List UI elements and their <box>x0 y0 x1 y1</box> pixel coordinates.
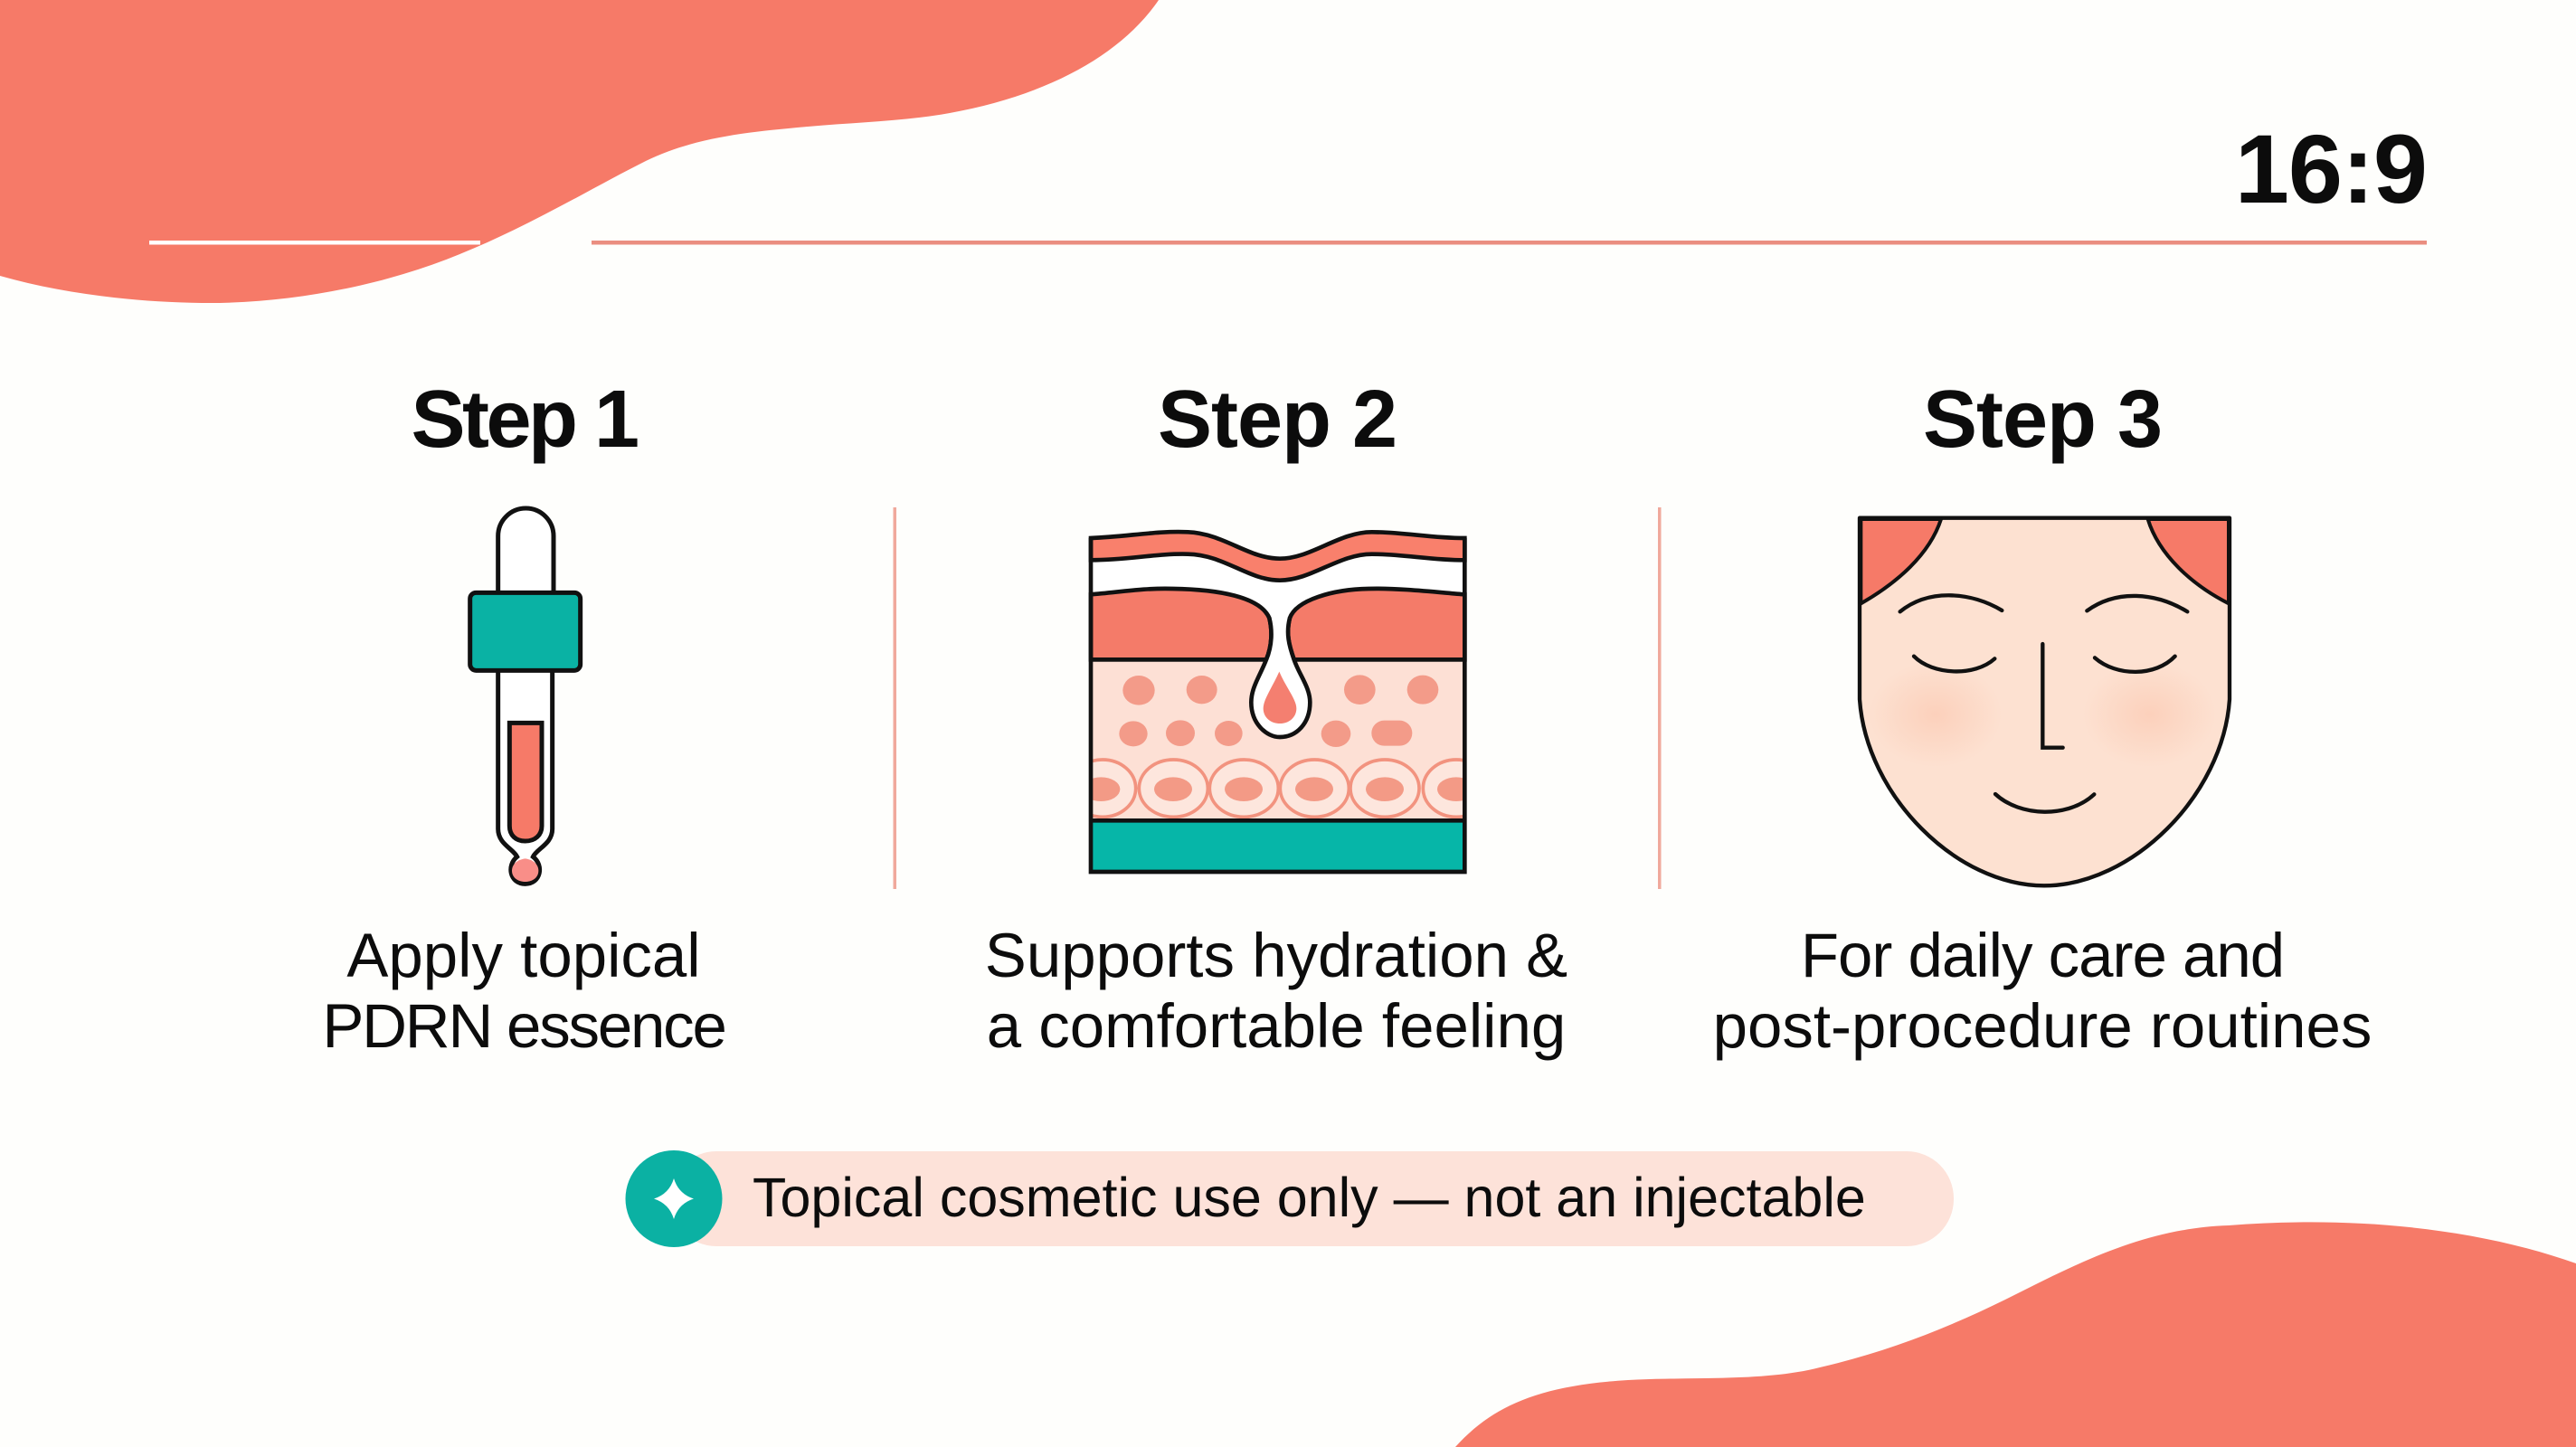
callout pill <box>669 1151 1954 1246</box>
teal base layer <box>1091 820 1464 872</box>
inner drop <box>1264 672 1296 724</box>
divider: step 2 and 3 <box>1658 507 1661 889</box>
step 3 heading: Step 3 <box>1923 374 2162 465</box>
step 1 description: PDRN essence <box>322 991 725 1061</box>
step 2 description: Supports hydration & <box>985 921 1567 990</box>
droplet at tip <box>512 858 538 882</box>
dermis particles <box>1119 675 1438 747</box>
dark coral layer right <box>1288 589 1464 659</box>
header rule on blob <box>149 241 480 244</box>
penetrating drop <box>1251 618 1310 737</box>
step 1 description: Apply topical <box>346 921 701 990</box>
liquid in tube <box>509 723 542 841</box>
aspect ratio label: 16:9 <box>2235 114 2427 223</box>
face shape <box>1860 518 2230 885</box>
cell row <box>1069 760 1490 817</box>
skin box outline <box>1091 538 1464 872</box>
hair right <box>2148 519 2229 603</box>
icon: teal badge with sparkle <box>626 1150 722 1247</box>
icon: dropper <box>470 508 581 884</box>
right cheek blush <box>2083 662 2216 767</box>
callout: usage note <box>626 1150 1954 1247</box>
top coral layer <box>1091 532 1464 581</box>
decorative blob: top left <box>0 0 1159 303</box>
white layer <box>1091 560 1464 659</box>
step 2 heading: Step 2 <box>1158 374 1397 465</box>
dropper collar <box>470 592 581 670</box>
icon: relaxed face <box>1860 518 2230 885</box>
decorative blob: bottom right <box>1455 1222 2576 1447</box>
callout text: Topical cosmetic use only — not an injectable <box>753 1167 1866 1228</box>
header rule <box>592 241 2427 244</box>
dermis layer <box>1091 659 1464 821</box>
step 3 description: post-procedure routines <box>1713 991 2372 1061</box>
dark coral layer left <box>1091 589 1272 659</box>
step 2 description: a comfortable feeling <box>987 991 1566 1061</box>
face features <box>1900 595 2187 812</box>
step 1 heading: Step 1 <box>411 374 638 465</box>
dropper bulb <box>498 508 554 592</box>
left cheek blush <box>1870 662 2002 767</box>
divider: step 1 and 2 <box>894 507 896 889</box>
step 3 description: For daily care and <box>1801 921 2284 990</box>
hair left <box>1861 519 1941 603</box>
icon: skin cross-section <box>1069 532 1490 872</box>
dropper tube <box>498 671 553 884</box>
